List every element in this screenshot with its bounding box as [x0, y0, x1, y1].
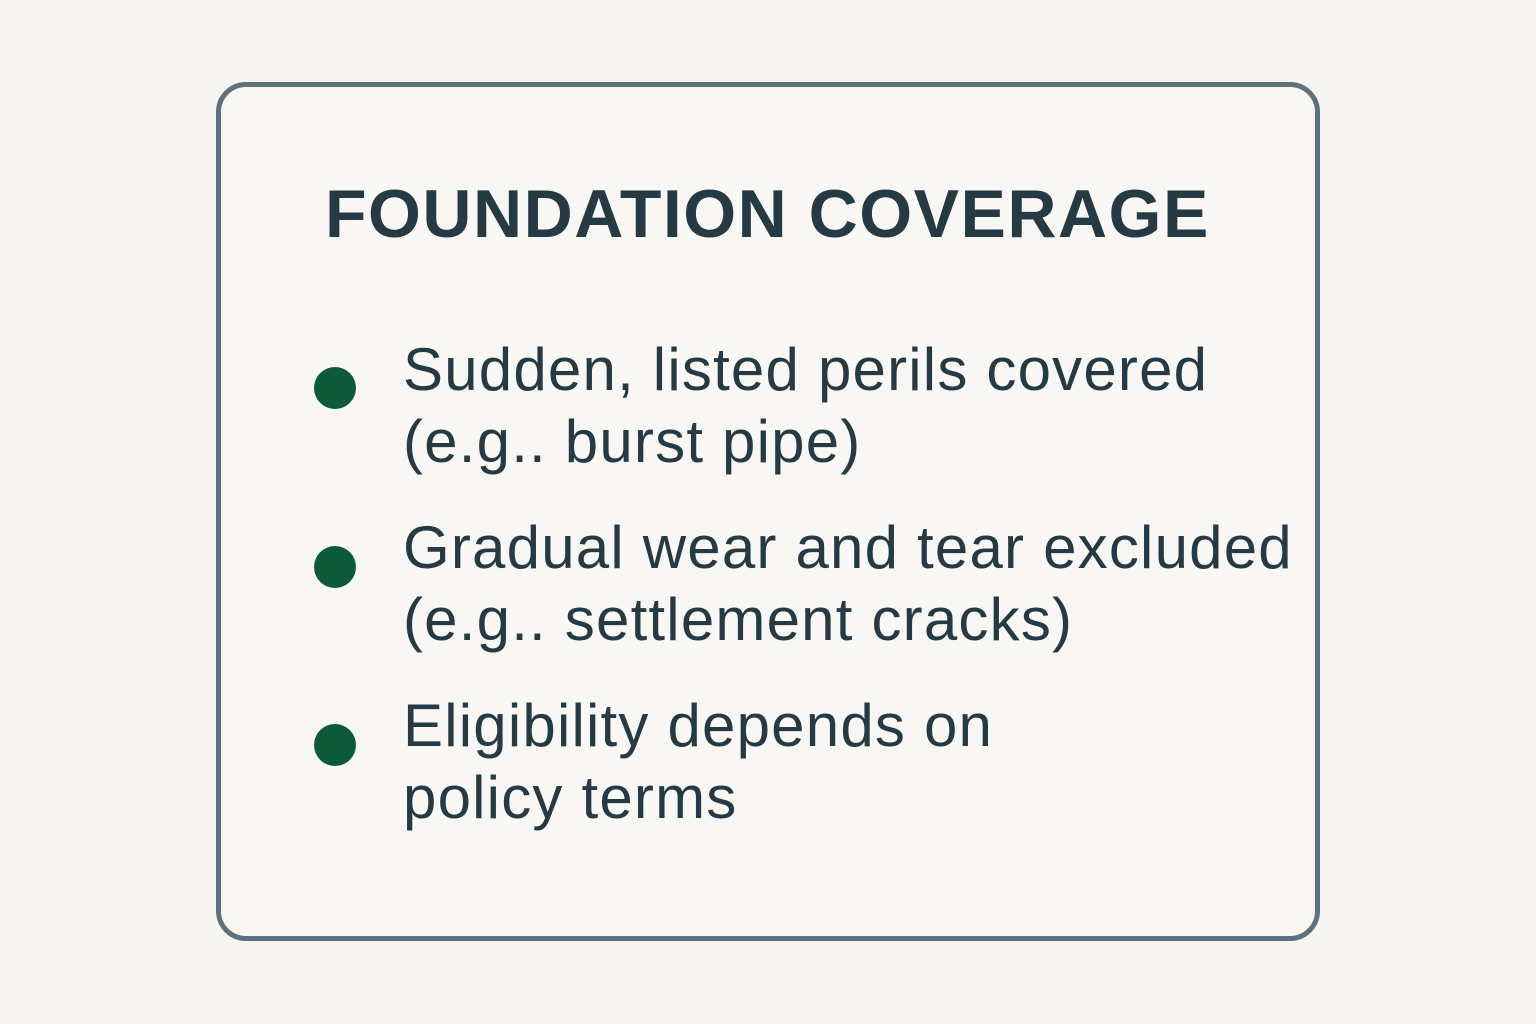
icon: green bullet [314, 367, 356, 409]
icon: green bullet [314, 546, 356, 588]
bullet item: eligibility [314, 692, 993, 831]
text: gradual wear: Gradual wear and tear excluded [403, 514, 1293, 581]
text: sudden perils: Sudden, listed perils covered [403, 336, 1208, 403]
panel: foundation coverage card [216, 82, 1320, 941]
text: eligibility [403, 692, 993, 831]
text: sudden perils [403, 336, 1208, 475]
text: eligibility: policy terms [403, 764, 737, 831]
text: gradual wear: (e.g.. settlement cracks) [403, 586, 1073, 653]
text: eligibility: Eligibility depends on [403, 692, 993, 759]
bullet item: sudden perils [314, 336, 1208, 475]
text: sudden perils: (e.g.. burst pipe) [403, 408, 861, 475]
title: FOUNDATION COVERAGE [325, 176, 1210, 252]
icon: green bullet [314, 724, 356, 766]
text: gradual wear [403, 514, 1293, 653]
bullet item: gradual wear [314, 514, 1293, 653]
